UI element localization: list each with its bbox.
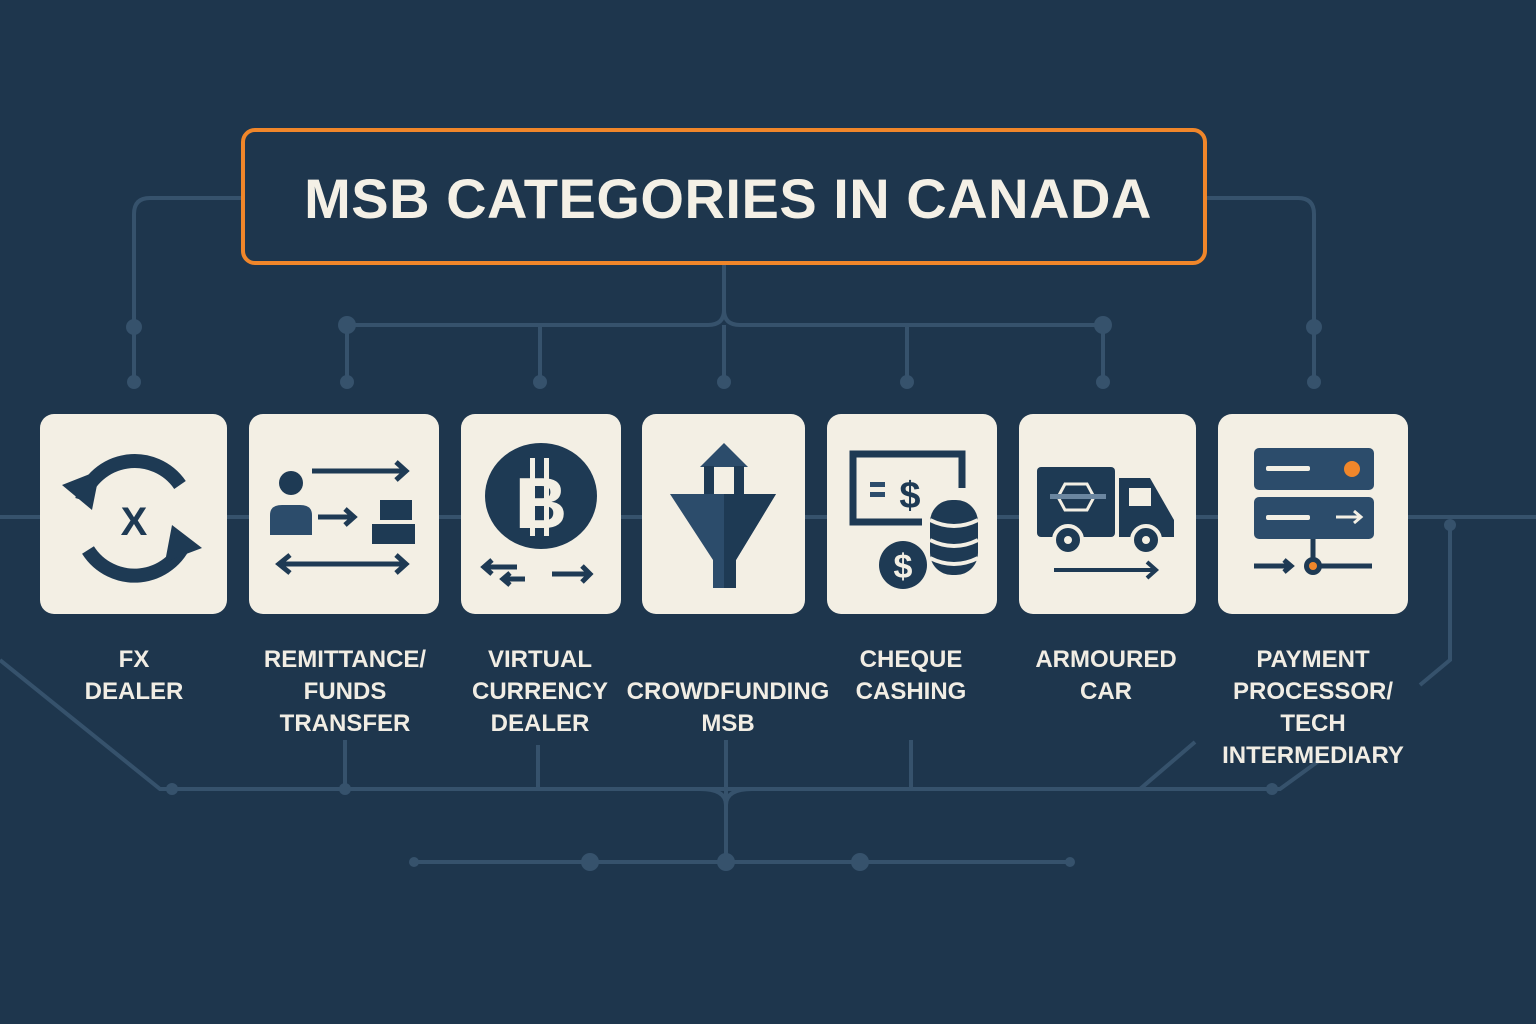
title: MSB CATEGORIES IN CANADA [304,167,1152,230]
labels: DEALER [85,678,183,705]
card: FX dealer: X [121,500,148,544]
labels: VIRTUAL [488,646,592,673]
card: armoured car [1019,414,1196,614]
labels: DEALER [491,710,589,737]
card: FX dealer [40,414,227,614]
card: crowdfunding [642,414,805,614]
card: payment processor [1218,414,1408,614]
title [243,130,1205,263]
labels: REMITTANCE/ [264,646,426,673]
labels: FX [119,646,149,673]
labels: PROCESSOR/ [1233,678,1393,705]
labels: ARMOURED [1035,646,1177,673]
labels: CROWDFUNDING [627,678,829,705]
labels: TRANSFER [280,710,410,737]
card: virtual currency [461,414,621,614]
labels: CASHING [856,678,966,705]
labels: TECH [1280,710,1346,737]
labels: FUNDS [304,678,386,705]
labels: MSB [701,710,755,737]
labels [85,646,1404,769]
card: cheque cashing [827,414,997,614]
labels: CURRENCY [472,678,608,705]
labels: PAYMENT [1256,646,1370,673]
card: cheque cashing: $ [894,548,913,586]
labels: CAR [1080,678,1132,705]
card: cheque cashing: $ [899,475,921,517]
labels: INTERMEDIARY [1222,742,1404,769]
card: remittance [249,414,439,614]
labels: CHEQUE [860,646,962,673]
card: virtual currency: B [515,464,567,544]
